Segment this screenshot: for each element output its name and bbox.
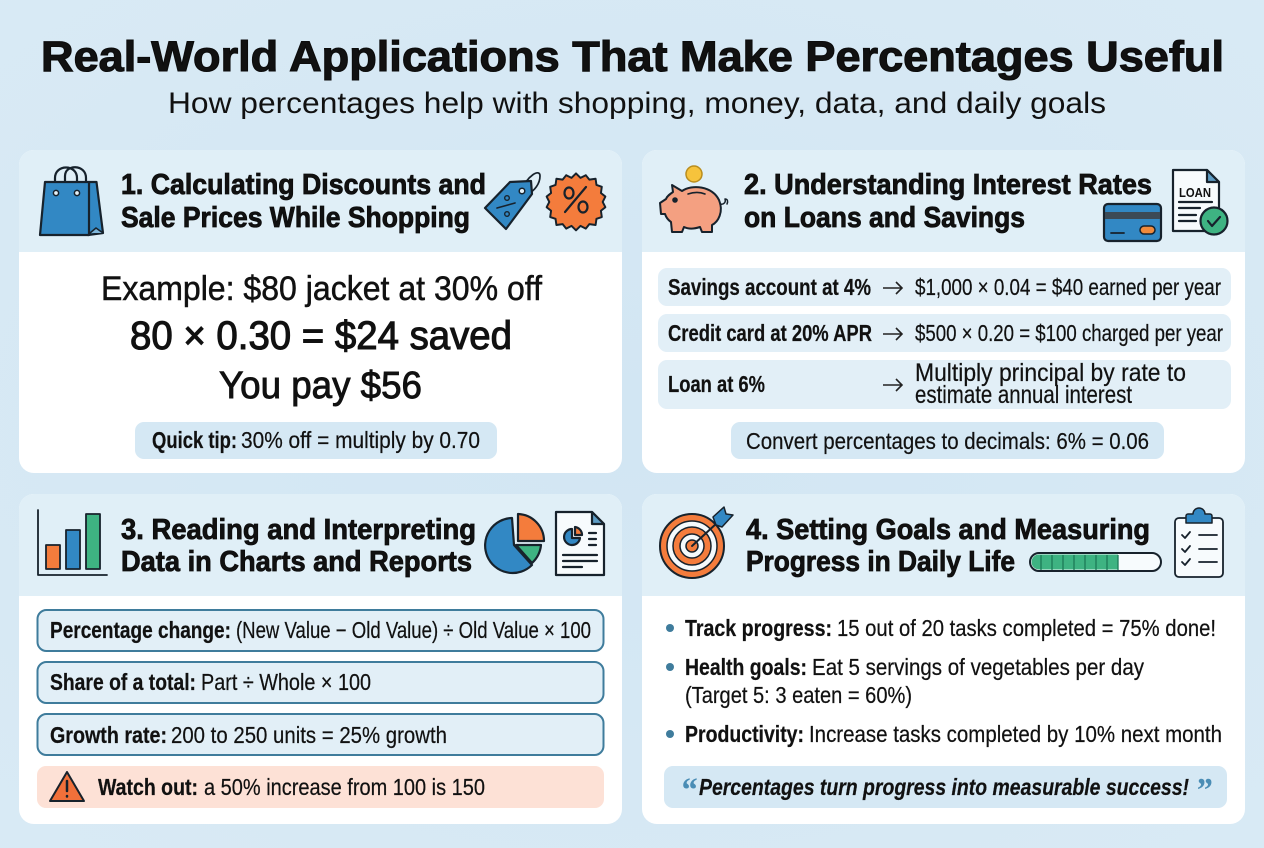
heading: interest rates: on Loans and Savings (744, 202, 1025, 234)
icon: loan document (1173, 170, 1228, 234)
bullet: health goals: Eat 5 servings of vegetables per day (812, 654, 1144, 680)
quick tip: Quick tip: (152, 427, 237, 453)
heading: discounts (121, 169, 486, 234)
icon: credit card (1104, 204, 1161, 241)
quick tip (135, 422, 497, 459)
percentage change row (38, 610, 604, 651)
heading: goals (746, 514, 1150, 578)
loan row: estimate annual interest (915, 381, 1132, 409)
icon: piggy bank (660, 166, 728, 232)
bullet: health goals (666, 654, 1144, 708)
example text: Example: $80 jacket at 30% off (101, 270, 543, 308)
growth row: 200 to 250 units = 25% growth (171, 722, 447, 748)
percentage change row: (New Value − Old Value) ÷ Old Value × 100 (236, 617, 591, 643)
warning callout (37, 766, 604, 808)
arrow (883, 328, 902, 340)
savings row: Savings account at 4% (668, 274, 871, 300)
example text: You pay $56 (219, 365, 422, 407)
bullet: productivity: Increase tasks completed by 10% next month (809, 721, 1222, 747)
heading: goals: Progress in Daily Life (746, 546, 1015, 578)
subtitle: How percentages help with shopping, money, data, and daily goals (168, 87, 1106, 120)
conversion note (731, 422, 1164, 459)
bullet: health goals: Health goals: (685, 654, 807, 680)
progress bar (1030, 553, 1161, 571)
share row: Part ÷ Whole × 100 (201, 669, 371, 695)
loan row: Multiply principal by rate to (915, 359, 1186, 387)
credit card row: Credit card at 20% APR (668, 320, 872, 346)
heading: reading data: 3. Reading and Interpreting (121, 514, 476, 546)
bullet: track progress (666, 615, 1216, 641)
growth row (38, 714, 604, 755)
conversion note: Convert percentages to decimals: 6% = 0.06 (746, 428, 1149, 454)
icon: clipboard checklist (1175, 508, 1223, 577)
heading: reading data (121, 514, 476, 578)
quote callout: “ (680, 772, 697, 809)
icon: percent burst (547, 173, 605, 230)
icon: warning triangle (50, 772, 84, 801)
panel: discounts (19, 150, 622, 473)
share row: Share of a total: (50, 669, 196, 695)
icon: shopping bag (40, 167, 103, 235)
loan row: Loan at 6% (668, 371, 765, 397)
icon: report document (556, 512, 604, 575)
savings row (658, 268, 1231, 306)
arrow (883, 379, 902, 391)
percentage change row: Percentage change: (50, 617, 231, 643)
bullet: health goals: (Target 5: 3 eaten = 60%) (685, 682, 912, 708)
warning callout: a 50% increase from 100 is 150 (204, 774, 485, 800)
growth row: Growth rate: (50, 722, 167, 748)
quote callout (664, 766, 1227, 809)
arrow (883, 282, 902, 294)
heading: goals: 4. Setting Goals and Measuring (746, 514, 1150, 546)
icon: price tag (485, 173, 540, 229)
heading: interest rates (744, 169, 1152, 234)
quote callout: Percentages turn progress into measurable success! (699, 774, 1189, 800)
quote callout: ” (1195, 772, 1212, 809)
bullet list (666, 615, 1222, 747)
icon: target with arrow (660, 507, 733, 578)
heading: reading data: Data in Charts and Reports (121, 546, 472, 578)
example text: 80 × 0.30 = $24 saved (130, 314, 512, 358)
bullet: productivity: Productivity: (685, 721, 804, 747)
share row (38, 662, 604, 703)
example text (101, 270, 543, 407)
heading: interest rates: 2. Understanding Interest Rates (744, 169, 1152, 201)
bullet: productivity (666, 721, 1222, 747)
title: Real-World Applications That Make Percentages Useful (41, 33, 1224, 81)
panel: goals (642, 494, 1245, 824)
credit card row (658, 314, 1231, 352)
panel: reading data (19, 494, 622, 824)
bullet: track progress: 15 out of 20 tasks completed = 75% done! (837, 615, 1216, 641)
loan row (658, 359, 1231, 409)
bullet: track progress: Track progress: (685, 615, 832, 641)
quick tip: 30% off = multiply by 0.70 (241, 427, 480, 453)
warning callout: Watch out: (98, 774, 198, 800)
heading: discounts: 1. Calculating Discounts and (121, 169, 486, 201)
icon: bar chart (38, 510, 107, 575)
panel: interest rates (642, 150, 1245, 473)
icon: loan document: LOAN (1179, 185, 1211, 200)
icon: pie chart (485, 514, 544, 573)
heading: discounts: Sale Prices While Shopping (121, 202, 470, 234)
